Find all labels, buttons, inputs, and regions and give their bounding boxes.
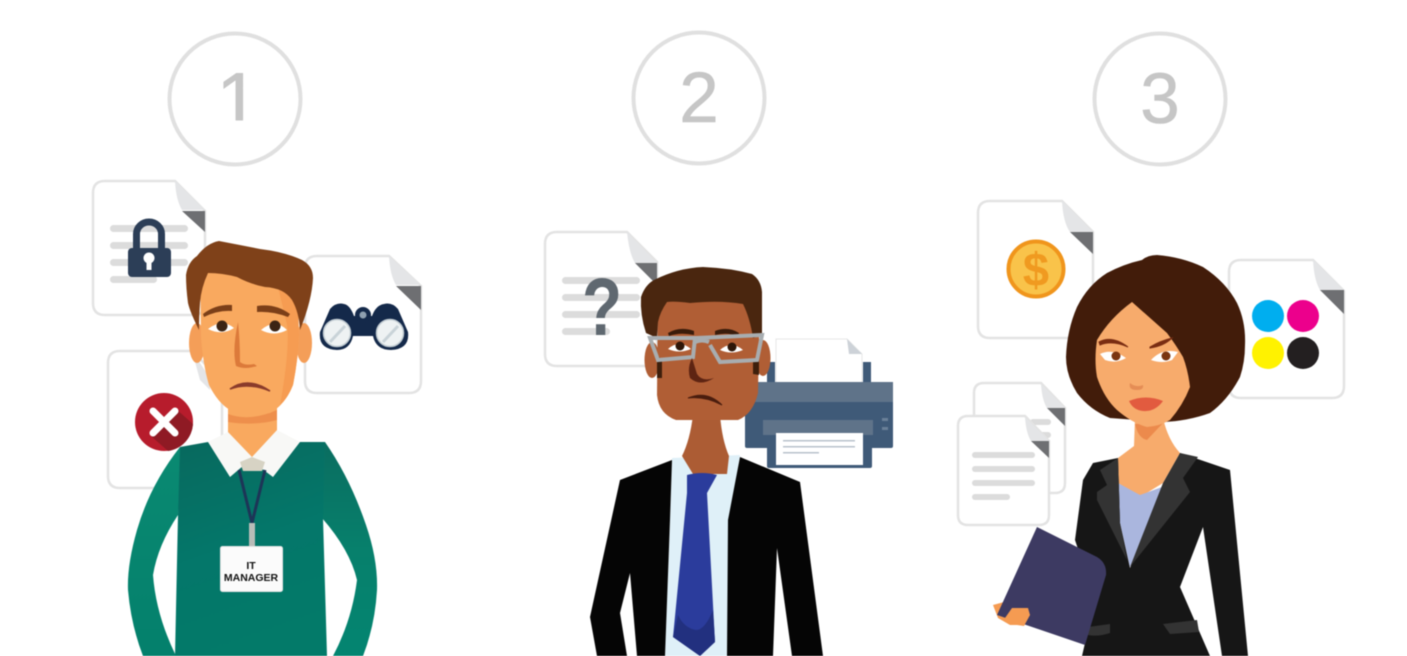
- face: [657, 285, 760, 420]
- nose: [1130, 383, 1143, 390]
- document icon: coin: $: [1023, 243, 1049, 296]
- eyes: [668, 344, 691, 352]
- ears: [189, 323, 205, 363]
- lapels: [1097, 453, 1198, 567]
- neck: [228, 405, 277, 463]
- step number 2: [634, 32, 764, 164]
- step number 3: 3: [1140, 60, 1180, 139]
- person 1: IT manager: [128, 241, 377, 656]
- eyebrows: [668, 329, 694, 336]
- jacket: [1075, 453, 1248, 656]
- ears: [644, 342, 660, 378]
- mouth: [230, 383, 270, 391]
- pockets: [1163, 620, 1199, 634]
- shirt: [665, 455, 740, 656]
- step number 1: [170, 34, 300, 164]
- document icon: binoculars: [305, 256, 421, 393]
- step number 1: 1: [216, 56, 260, 144]
- eyebrows: [203, 305, 232, 317]
- document icon: error cross: [108, 351, 222, 488]
- person 3: manager with folder: [993, 255, 1248, 656]
- document icon: CMYK ink: [1229, 260, 1344, 398]
- hair: [641, 267, 762, 338]
- glasses: [650, 335, 762, 362]
- collar: [208, 430, 300, 477]
- tie: [673, 473, 717, 656]
- name badge: MANAGER: [224, 572, 279, 584]
- hand: [993, 602, 1030, 625]
- eyebrows: [1099, 339, 1128, 347]
- face: [1096, 302, 1190, 427]
- sideburns: [657, 355, 662, 378]
- face: [200, 262, 299, 414]
- document icon: stacked pages: [958, 383, 1065, 525]
- document icon: padlock: [93, 181, 205, 315]
- neck: [682, 415, 729, 474]
- neck: [1118, 418, 1180, 497]
- eyes: [1100, 352, 1126, 362]
- lips: [1129, 398, 1163, 411]
- document icon: question mark: ?: [582, 261, 622, 353]
- nose: [234, 322, 257, 368]
- right sleeve: [322, 442, 377, 656]
- document icon: question mark: [545, 232, 657, 366]
- top: [1118, 483, 1162, 567]
- step number 3: [1094, 34, 1226, 164]
- document icon: coin: [978, 201, 1093, 338]
- lanyard: [239, 470, 265, 523]
- folder: [997, 527, 1106, 645]
- hair: [1066, 255, 1245, 422]
- name badge: [220, 546, 282, 592]
- person 2: executive with glasses: [590, 267, 823, 656]
- name badge: IT: [246, 560, 256, 572]
- mouth: [688, 395, 722, 405]
- torso: [175, 442, 327, 656]
- eyes: [208, 323, 234, 332]
- step number 2: 2: [679, 59, 719, 138]
- nose: [689, 358, 714, 382]
- printer: [745, 339, 893, 468]
- jacket: [590, 460, 672, 656]
- left sleeve: [128, 447, 184, 656]
- hair: [186, 241, 313, 330]
